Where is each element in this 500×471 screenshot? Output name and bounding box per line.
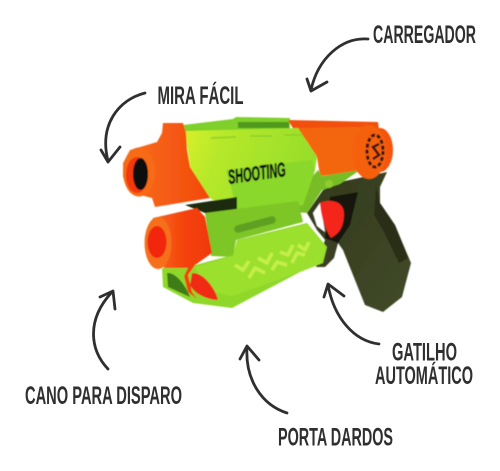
arrow: porta dardos (240, 346, 287, 413)
main green body (185, 128, 317, 214)
middle barrel (145, 208, 212, 299)
chevron pattern (235, 242, 309, 278)
grip texture (374, 186, 408, 263)
middle barrel hole (148, 226, 166, 258)
green middle barrel (205, 201, 303, 257)
rear drum (367, 128, 393, 172)
top muzzle rim (123, 148, 155, 196)
arrow: carregador (307, 39, 368, 91)
top orange rail (288, 120, 381, 145)
dart holes (167, 273, 190, 297)
label: mira facil: MIRA FÁCIL (158, 81, 244, 110)
SHOOTING label: SHOOTING (227, 159, 287, 189)
trigger (320, 201, 344, 238)
body fold (226, 160, 315, 214)
drum logo (367, 135, 383, 167)
barrel slot (238, 220, 272, 229)
green lower frame (290, 170, 360, 213)
label: porta dardos: PORTA DARDOS (278, 424, 393, 452)
label: cano para disparo: CANO PARA DISPARO (25, 382, 182, 410)
top green rail (183, 117, 290, 136)
body vents (211, 135, 302, 138)
lower magazine block (162, 223, 327, 308)
shadow under top barrel (185, 197, 237, 214)
label: gatilho automatico (375, 338, 473, 390)
toy blaster (123, 117, 411, 312)
arrow: gatilho automatico (324, 284, 379, 344)
arrow: cano para disparo (94, 291, 115, 369)
dark grip (307, 172, 411, 312)
top nozzle (123, 123, 210, 207)
top barrel hole (126, 157, 148, 193)
lower dark piece (316, 240, 338, 267)
label: gatilho automatico: GATILHO (392, 338, 457, 366)
rear orange panel (298, 127, 378, 176)
trigger opening (325, 192, 358, 243)
middle muzzle rim (144, 217, 172, 269)
arrow: mira facil (101, 93, 145, 162)
